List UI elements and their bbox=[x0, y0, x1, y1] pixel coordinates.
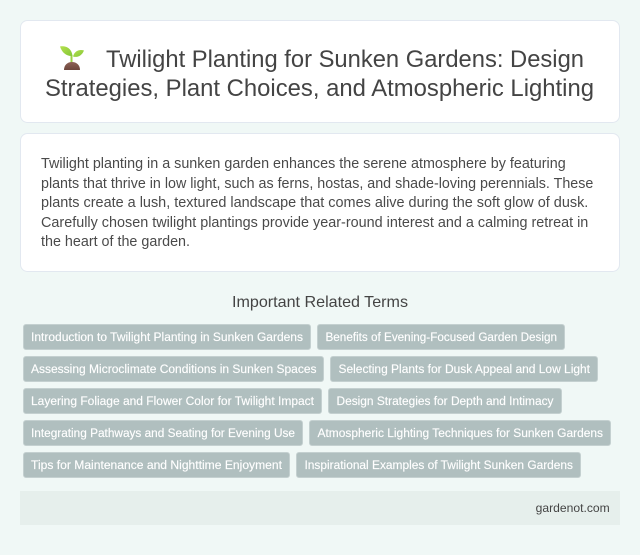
text block: introduction: the heart of the garden. bbox=[41, 234, 190, 250]
text block: introduction: Twilight planting in a sunken garden enhances the serene atmosphere by featuring bbox=[41, 156, 566, 172]
title: Strategies, Plant Choices, and Atmospheric Lighting bbox=[45, 75, 594, 102]
chip: inspirational examples bbox=[296, 452, 580, 478]
chip: design strategies bbox=[328, 388, 562, 414]
text block: introduction: plants create a lush, textured landscape that comes alive during the soft glow of dusk. bbox=[41, 195, 588, 211]
chip: selecting plants: Selecting Plants for Dusk Appeal and Low Light bbox=[338, 362, 591, 376]
text block: introduction: plants that thrive in low light, such as ferns, hostas, and shade-loving perennials. These bbox=[41, 176, 593, 192]
text block: introduction bbox=[41, 156, 593, 250]
panel: introduction card bbox=[20, 134, 620, 272]
chip: microclimate bbox=[24, 356, 324, 382]
chip: introduction bbox=[24, 324, 310, 350]
icon: seedling bbox=[60, 46, 84, 70]
chip: lighting bbox=[310, 420, 610, 446]
chip: microclimate: Assessing Microclimate Conditions in Sunken Spaces bbox=[31, 362, 316, 376]
chip: maintenance bbox=[24, 452, 290, 478]
chip: pathways: Integrating Pathways and Seating for Evening Use bbox=[31, 426, 295, 440]
chip: layering: Layering Foliage and Flower Color for Twilight Impact bbox=[31, 394, 315, 408]
text block: introduction: Carefully chosen twilight plantings provide year-round interest and a calming retreat in bbox=[41, 215, 588, 231]
panel: related term chips bbox=[24, 324, 610, 478]
chip: introduction: Introduction to Twilight Planting in Sunken Gardens bbox=[31, 330, 303, 344]
title: Twilight Planting for Sunken Gardens: Design bbox=[106, 46, 584, 73]
chip: design strategies: Design Strategies for Depth and Intimacy bbox=[336, 394, 554, 408]
chip: benefits bbox=[318, 324, 564, 350]
footer bbox=[20, 491, 620, 525]
chip: pathways bbox=[24, 420, 302, 446]
chip: layering bbox=[24, 388, 322, 414]
heading: important related terms: Important Related Terms bbox=[232, 294, 408, 311]
chip: selecting plants bbox=[330, 356, 598, 382]
panel: title card bbox=[20, 20, 620, 122]
chip: inspirational examples: Inspirational Examples of Twilight Sunken Gardens bbox=[304, 458, 573, 472]
title bbox=[45, 46, 594, 102]
footer source label: gardenot.com bbox=[536, 501, 610, 515]
chip: benefits: Benefits of Evening-Focused Garden Design bbox=[326, 330, 557, 344]
chip: maintenance: Tips for Maintenance and Nighttime Enjoyment bbox=[31, 458, 283, 472]
chip: lighting: Atmospheric Lighting Techniques for Sunken Gardens bbox=[318, 426, 603, 440]
